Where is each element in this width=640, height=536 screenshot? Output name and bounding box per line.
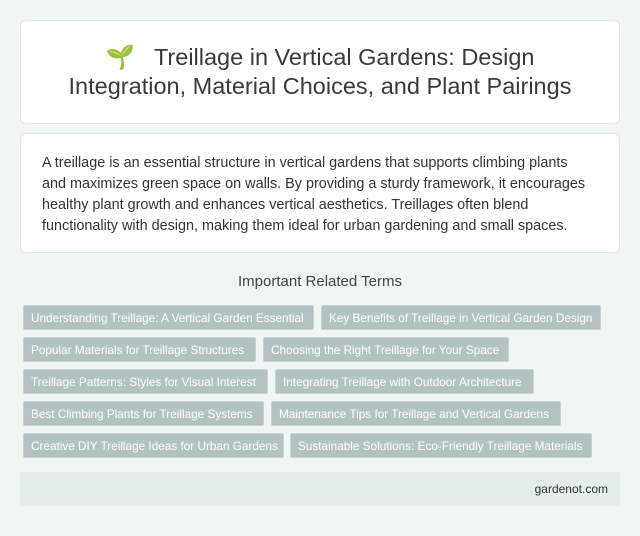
tag: Maintenance Tips for Treillage and Vertical Gardens (279, 407, 549, 421)
title: 🌱 Treillage in Vertical Gardens: Design (106, 44, 534, 70)
tag: Choosing the Right Treillage for Your Space (271, 343, 499, 357)
tag (23, 401, 264, 426)
tag (263, 337, 509, 362)
tag (23, 369, 268, 394)
tag (271, 401, 561, 426)
footer source: gardenot.com (535, 482, 608, 496)
tag (321, 305, 601, 330)
tag (275, 369, 534, 394)
tag: Key Benefits of Treillage in Vertical Garden Design (329, 311, 592, 325)
tag: Sustainable Solutions: Eco-Friendly Treillage Materials (298, 439, 582, 453)
title card (20, 20, 620, 124)
tag: Creative DIY Treillage Ideas for Urban Gardens (31, 439, 278, 453)
tag: Treillage Patterns: Styles for Visual Interest (31, 375, 256, 389)
footer (20, 472, 620, 506)
tag: Best Climbing Plants for Treillage Systems (31, 407, 253, 421)
tag (290, 433, 592, 458)
tag (23, 433, 284, 458)
tag: Integrating Treillage with Outdoor Architecture (283, 375, 522, 389)
description card (20, 133, 620, 253)
title (69, 44, 571, 99)
tag (23, 337, 256, 362)
section heading: Important Related Terms (238, 273, 402, 290)
description text: A treillage is an essential structure in vertical gardens that supports climbing plants and maximizes green space on walls. By providing a sturdy framework, it encourages healthy plant growth and enhances vertical aesthetics. Treillages often blend functionality with design, making them ideal for urban gardening and small spaces. (42, 155, 585, 234)
title: Integration, Material Choices, and Plant Pairings (69, 73, 571, 99)
tag: Popular Materials for Treillage Structures (31, 343, 244, 357)
tag: Understanding Treillage: A Vertical Garden Essential (31, 311, 304, 325)
tag (23, 305, 314, 330)
